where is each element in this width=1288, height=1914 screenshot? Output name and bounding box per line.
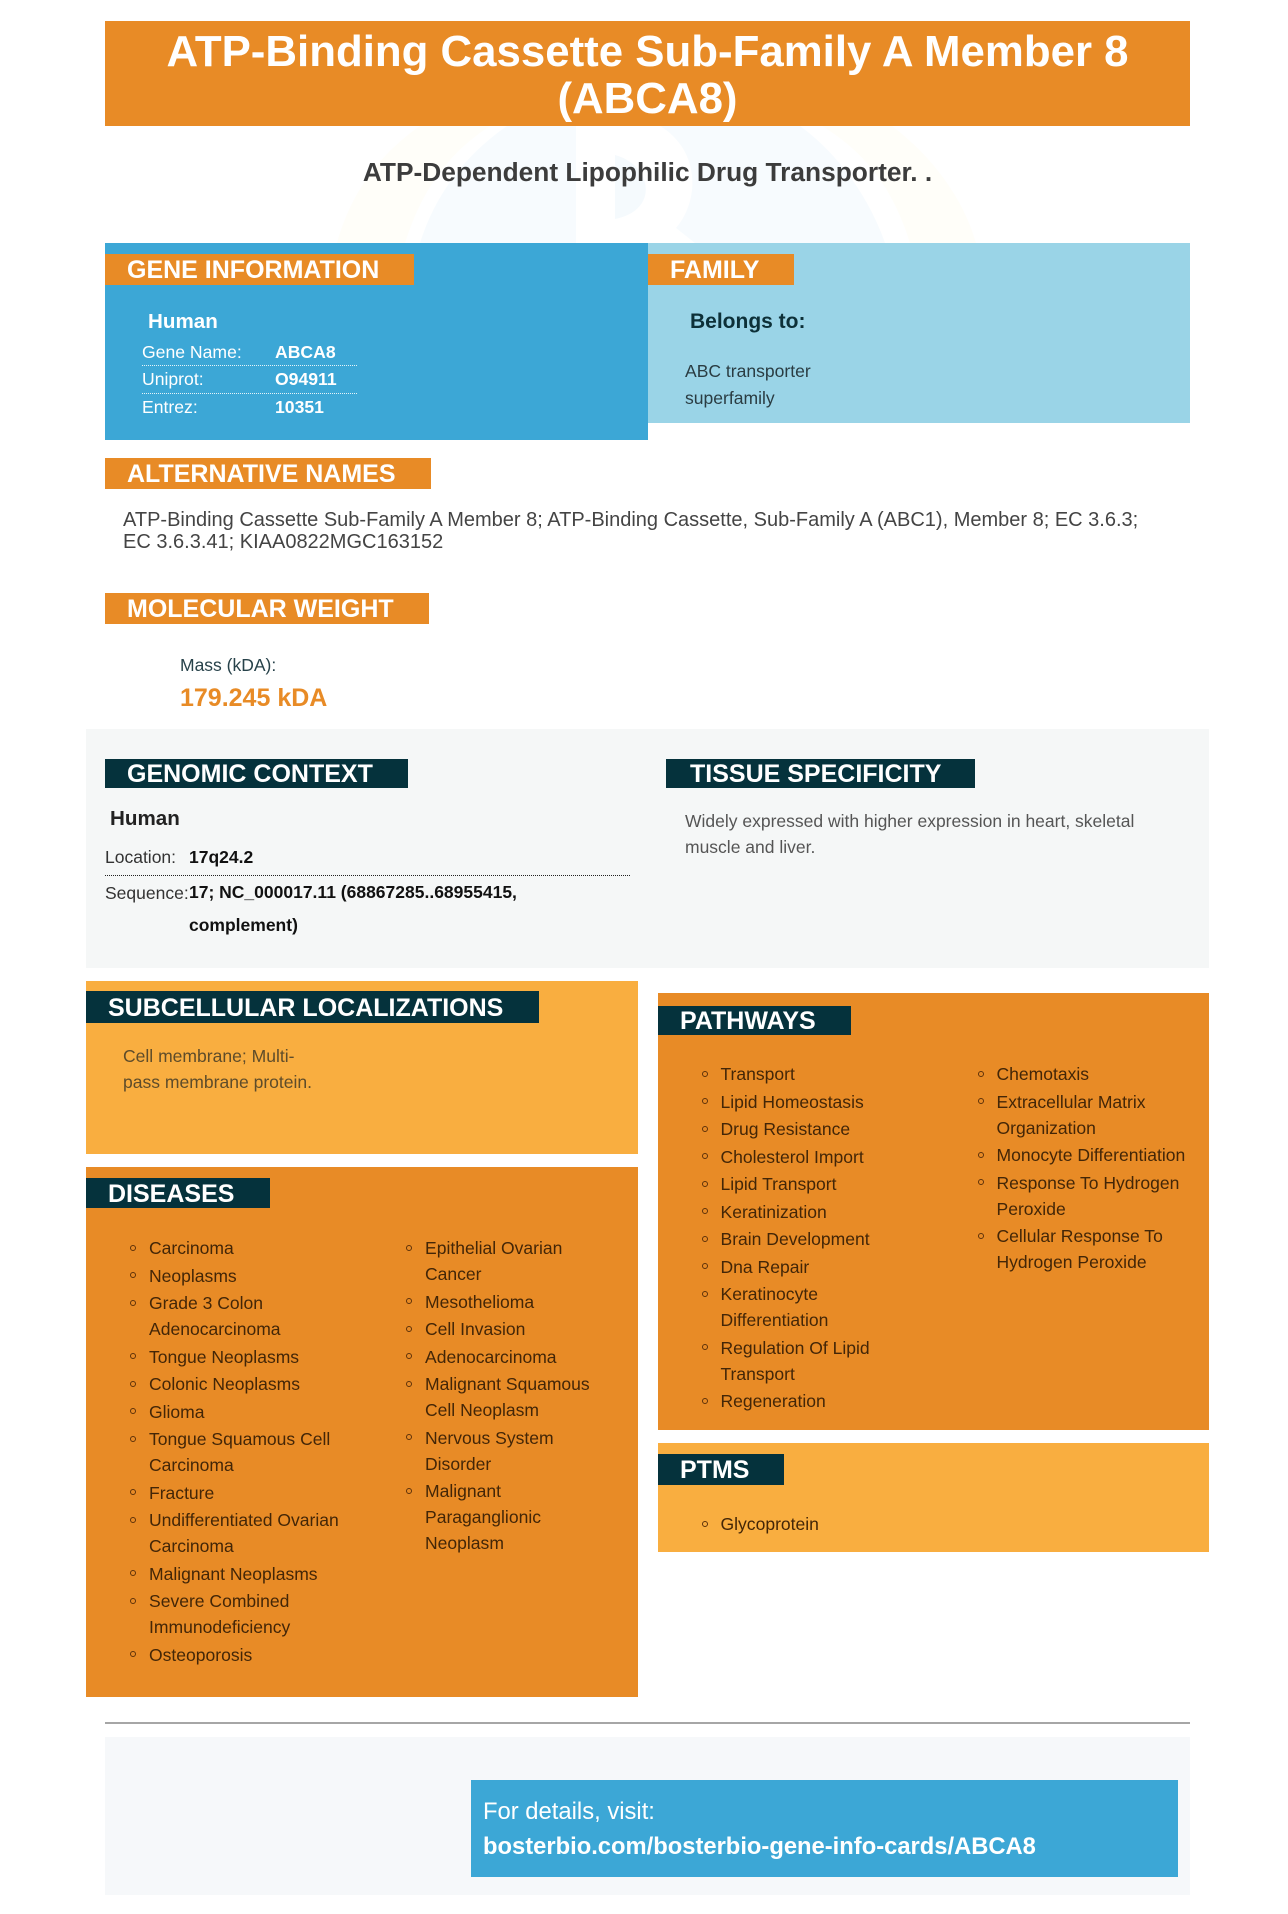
panel: pathways <box>658 993 1209 1430</box>
pathways list column 2: Hydrogen Peroxide <box>996 1252 1147 1272</box>
uniprot row: O94911 <box>275 369 337 389</box>
panel: gene information <box>105 243 648 440</box>
callout: details link <box>471 1780 1178 1877</box>
uniprot row: Uniprot: <box>142 369 204 389</box>
diseases list column 1: Malignant Neoplasms <box>149 1564 318 1584</box>
panel: footer <box>105 1737 1190 1895</box>
diseases list column 1: Colonic Neoplasms <box>149 1374 300 1394</box>
tissue specificity text <box>685 811 1134 857</box>
sequence value: complement) <box>189 915 298 935</box>
family text: superfamily <box>685 388 775 408</box>
pathways list column 1 <box>702 1064 870 1411</box>
alternative names text: ATP-Binding Cassette Sub-Family A Member 8; ATP-Binding Cassette, Sub-Family A (ABC1), Member 8; EC 3.6.3; <box>123 509 1138 531</box>
pathways list column 1: Keratinization <box>720 1202 827 1222</box>
pathways list column 2: Response To Hydrogen <box>996 1172 1179 1192</box>
pathways list column 1: Lipid Homeostasis <box>720 1092 864 1112</box>
entrez row: 10351 <box>275 397 324 417</box>
pathways list column 2: Organization <box>996 1118 1096 1138</box>
diseases list column 2: Mesothelioma <box>425 1292 534 1312</box>
sequence label: Sequence: <box>105 883 189 903</box>
diseases list column 2: Nervous System <box>425 1428 554 1448</box>
heading: alternative names: ALTERNATIVE NAMES <box>127 460 396 488</box>
mass value: 179.245 kDA <box>180 684 327 712</box>
heading: molecular weight: MOLECULAR WEIGHT <box>127 595 394 623</box>
diseases list column 1: Adenocarcinoma <box>149 1319 281 1339</box>
diseases list column 2: Cell Invasion <box>425 1319 525 1339</box>
diseases list column 2: Cell Neoplasm <box>425 1400 539 1420</box>
gene name row: ABCA8 <box>275 342 336 362</box>
title <box>105 21 1190 126</box>
diseases list column 1: Fracture <box>149 1482 214 1502</box>
family text <box>685 361 811 408</box>
heading: family: FAMILY <box>670 256 759 284</box>
diseases list column 1: Glioma <box>149 1402 205 1422</box>
title: (ABCA8) <box>557 74 738 123</box>
diseases list column 1: Carcinoma <box>149 1536 234 1556</box>
subcellular text: Cell membrane; Multi- <box>123 1046 294 1066</box>
diseases list column 1: Tongue Squamous Cell <box>149 1429 330 1449</box>
heading: genomic context: GENOMIC CONTEXT <box>127 760 373 788</box>
diseases list column 2: Malignant Squamous <box>425 1374 590 1394</box>
tissue specificity text: muscle and liver. <box>685 837 815 857</box>
pathways list column 2: Peroxide <box>996 1198 1066 1218</box>
pathways list column 2 <box>978 1064 1185 1272</box>
heading: pathways: PATHWAYS <box>680 1007 816 1035</box>
uniprot row <box>142 368 357 394</box>
heading: diseases <box>86 1178 270 1208</box>
diseases list column 1: Tongue Neoplasms <box>149 1346 299 1366</box>
species label: Human <box>148 310 218 333</box>
alternative names text: EC 3.6.3.41; KIAA0822MGC163152 <box>123 531 443 553</box>
diseases list column 1: Severe Combined <box>149 1591 289 1611</box>
mass label: Mass (kDA): <box>180 655 276 675</box>
alternative names text <box>123 509 1138 553</box>
diseases list column 1: Osteoporosis <box>149 1644 252 1664</box>
diseases list column 2: Disorder <box>425 1454 491 1474</box>
pathways list column 2: Cellular Response To <box>996 1226 1163 1246</box>
pathways list column 1: Transport <box>720 1364 795 1384</box>
pathways list column 1: Transport <box>720 1064 795 1084</box>
pathways list column 1: Regulation Of Lipid <box>720 1338 870 1358</box>
pathways list column 1: Differentiation <box>720 1310 828 1330</box>
tissue specificity text: Widely expressed with higher expression in heart, skeletal <box>685 811 1134 831</box>
heading: subcellular localizations: SUBCELLULAR LOCALIZATIONS <box>108 994 503 1022</box>
heading: family <box>648 254 794 285</box>
details url: bosterbio.com/bosterbio-gene-info-cards/ABCA8 <box>483 1833 1036 1860</box>
entrez row: Entrez: <box>142 397 198 417</box>
title: ATP-Binding Cassette Sub-Family A Member 8 <box>166 27 1129 76</box>
diseases list column 1 <box>130 1238 339 1664</box>
heading: pathways <box>658 1006 851 1035</box>
location value: 17q24.2 <box>189 847 253 867</box>
heading: gene information: GENE INFORMATION <box>127 256 379 284</box>
pathways list column 2: Chemotaxis <box>996 1064 1089 1084</box>
heading: tissue specificity: TISSUE SPECIFICITY <box>690 760 941 788</box>
heading: ptms: PTMS <box>680 1456 749 1484</box>
subcellular text <box>123 1046 312 1092</box>
diseases list column 2 <box>406 1238 590 1553</box>
species label: Human <box>110 807 180 830</box>
diseases list column 1: Grade 3 Colon <box>149 1293 263 1313</box>
diseases list column 2: Neoplasm <box>425 1533 504 1553</box>
entrez row <box>142 397 324 417</box>
panel: ptms <box>658 1443 1209 1552</box>
heading: ptms <box>658 1454 784 1485</box>
panel: family <box>648 243 1190 423</box>
diseases list column 2: Malignant <box>425 1481 501 1501</box>
pathways list column 1: Regeneration <box>720 1391 826 1411</box>
pathways list column 2: Monocyte Differentiation <box>996 1145 1185 1165</box>
diseases list column 2: Adenocarcinoma <box>425 1346 557 1366</box>
pathways list column 1: Keratinocyte <box>720 1284 818 1304</box>
pathways list column 1: Cholesterol Import <box>720 1146 864 1166</box>
diseases list column 2: Paraganglionic <box>425 1507 541 1527</box>
diseases list column 1: Carcinoma <box>149 1238 234 1258</box>
sequence value: 17; NC_000017.11 (68867285..68955415, <box>189 882 517 902</box>
pathways list column 2: Extracellular Matrix <box>996 1092 1146 1112</box>
panel: genomic context and tissue specificity <box>86 729 1209 968</box>
panel: diseases <box>86 1167 638 1697</box>
pathways list column 1: Drug Resistance <box>720 1119 850 1139</box>
pathways list column 1: Brain Development <box>720 1229 870 1249</box>
panel: subcellular localizations <box>86 981 638 1154</box>
subtitle: ATP-Dependent Lipophilic Drug Transporter. . <box>363 157 932 187</box>
heading: diseases: DISEASES <box>108 1180 234 1208</box>
location row: Location: <box>105 847 176 867</box>
diseases list column 1: Undifferentiated Ovarian <box>149 1510 339 1530</box>
family text: ABC transporter <box>685 361 811 381</box>
diseases list column 2: Epithelial Ovarian <box>425 1238 562 1258</box>
details label: For details, visit: <box>483 1798 655 1825</box>
ptms list: Glycoprotein <box>720 1514 819 1534</box>
subcellular text: pass membrane protein. <box>123 1072 312 1092</box>
belongs to label: Belongs to: <box>690 310 806 333</box>
diseases list column 1: Immunodeficiency <box>149 1617 290 1637</box>
diseases list column 2: Cancer <box>425 1264 482 1284</box>
gene name row: Gene Name: <box>142 342 242 362</box>
diseases list column 1: Neoplasms <box>149 1266 237 1286</box>
pathways list column 1: Lipid Transport <box>720 1174 836 1194</box>
diseases list column 1: Carcinoma <box>149 1455 234 1475</box>
gene name row <box>142 340 357 366</box>
pathways list column 1: Dna Repair <box>720 1256 809 1276</box>
background watermark logo <box>615 155 646 219</box>
sequence value <box>189 882 517 935</box>
